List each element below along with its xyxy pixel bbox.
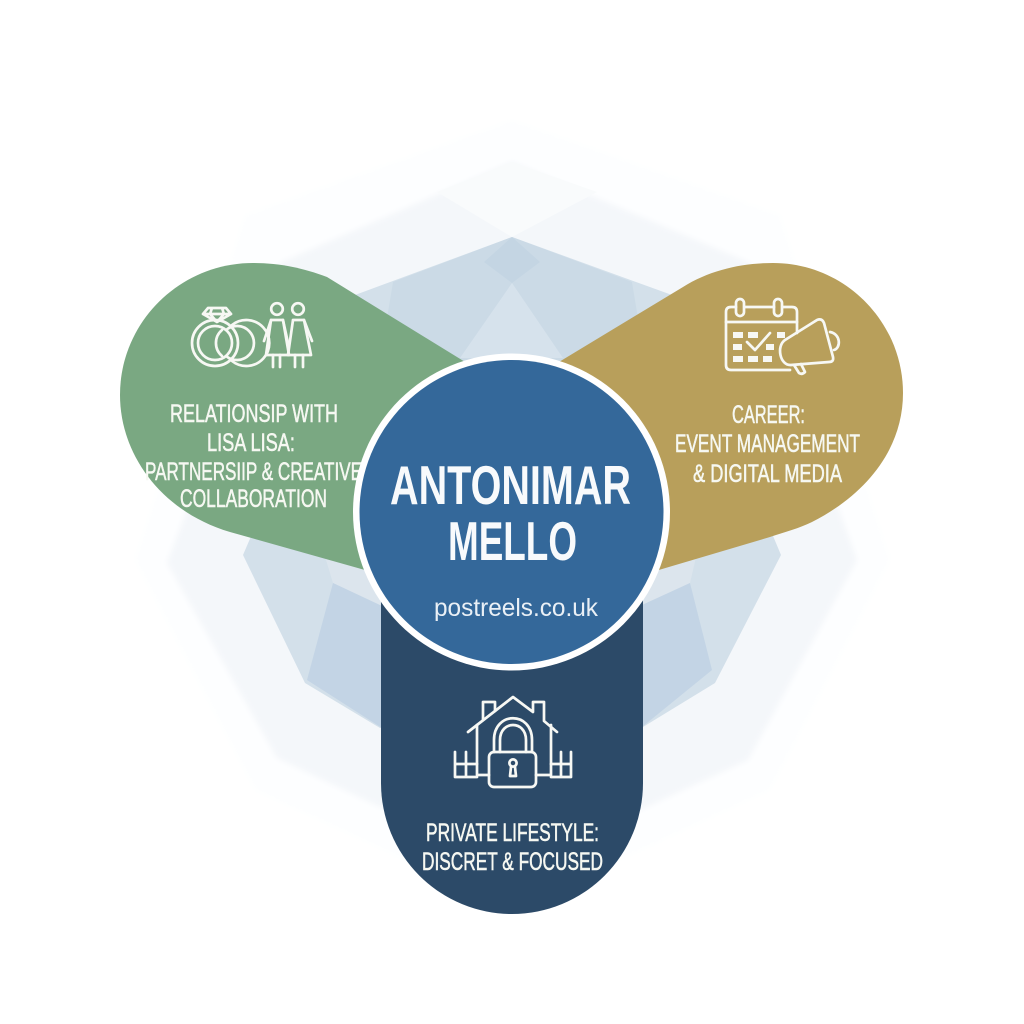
label: private lifestyle: PRIVATE LIFESTYLE: [426, 819, 599, 847]
website: postreels.co.uk [434, 594, 598, 622]
icon: wedding rings and couple [192, 303, 312, 367]
title: antonimar: ANTONIMAR [390, 454, 631, 516]
icon: calendar cells [733, 332, 785, 362]
icon: calendar and megaphone [726, 299, 839, 374]
label: discret and focused: DISCRET & FOCUSED [422, 848, 603, 876]
label: career: CAREER: [732, 401, 805, 429]
label: digital media: & DIGITAL MEDIA [693, 460, 842, 488]
panel: relationship [120, 263, 470, 572]
label: event management: EVENT MANAGEMENT [675, 430, 860, 458]
label: relationship line 3: PARTNERSIIP & CREATIVE [145, 458, 362, 486]
icon: house with padlock [455, 697, 571, 787]
label: relationship line 1: RELATIONSIP WITH [170, 400, 338, 428]
panel: career [554, 263, 903, 572]
center circle [353, 354, 670, 670]
title: mello: MELLO [448, 510, 577, 572]
panel: private lifestyle [381, 560, 643, 914]
label: relationship line 4: COLLABORATION [180, 485, 327, 513]
label: relationship line 2: LISA LISA: [207, 429, 295, 457]
background: faceted geometric gem [135, 120, 890, 910]
